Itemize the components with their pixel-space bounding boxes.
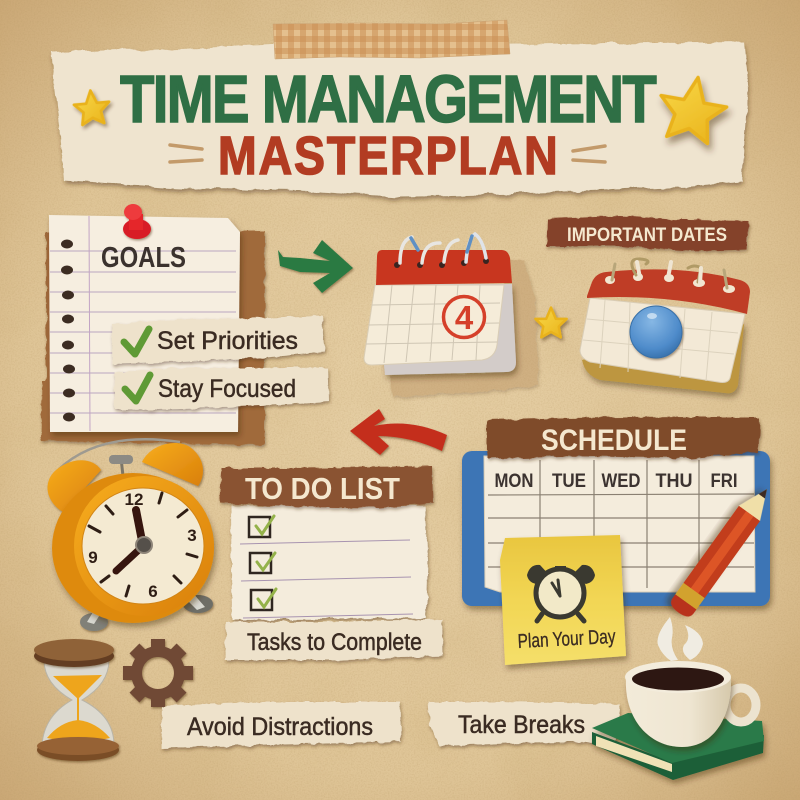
panel: calendar with date 4 bbox=[364, 234, 538, 397]
binder rings bbox=[605, 259, 735, 293]
icon: red push pin bbox=[123, 204, 151, 239]
strip: Stay Focused: Stay Focused bbox=[158, 375, 296, 403]
date grid bbox=[366, 285, 500, 363]
strip: Tasks to Complete: Tasks to Complete bbox=[247, 629, 422, 656]
spiral rings bbox=[394, 234, 489, 268]
page grid bbox=[583, 300, 738, 381]
strip: Set Priorities: Set Priorities bbox=[157, 327, 298, 355]
bezel bbox=[74, 476, 214, 616]
red header bbox=[587, 269, 750, 314]
checkbox rows bbox=[240, 516, 413, 618]
strip: Tasks to Complete bbox=[225, 619, 443, 660]
blue button bbox=[630, 306, 682, 358]
timetable sheet bbox=[484, 456, 755, 592]
sticky label: Plan Your Day bbox=[517, 626, 616, 653]
strip: Set Priorities bbox=[112, 316, 325, 364]
page rules bbox=[50, 216, 236, 431]
dial bbox=[82, 488, 204, 604]
icon: gear bbox=[123, 639, 193, 707]
icon: small star bbox=[73, 89, 111, 125]
lower sand bbox=[47, 720, 110, 742]
dial numbers: 3 bbox=[187, 526, 197, 545]
top cap bbox=[34, 639, 114, 667]
clock hands bbox=[116, 510, 143, 571]
dial numbers: 6 bbox=[148, 582, 158, 601]
heading banner: To Do List: TO DO LIST bbox=[245, 471, 400, 506]
icon: green check bbox=[125, 375, 150, 401]
dial numbers: 9 bbox=[88, 548, 98, 567]
heading banner: Schedule: SCHEDULE bbox=[541, 424, 687, 457]
heading banner: To Do List bbox=[219, 466, 433, 508]
strip: Avoid Distractions: Avoid Distractions bbox=[187, 713, 373, 741]
subtitle: Masterplan: MASTERPLAN bbox=[218, 125, 558, 186]
clock feet bbox=[80, 592, 213, 631]
back pages bbox=[376, 284, 516, 375]
title line: Time Management: TIME MANAGEMENT bbox=[120, 62, 657, 137]
panel: title banner bbox=[52, 20, 749, 197]
front page bbox=[364, 285, 504, 365]
icon: alarm clock sketch bbox=[527, 565, 595, 621]
body bbox=[52, 473, 214, 623]
icon: coffee cup bbox=[625, 617, 756, 747]
stain shadow bbox=[390, 258, 538, 397]
strip: Take Breaks bbox=[428, 702, 620, 746]
arrow: red, schedule to to-do bbox=[350, 409, 447, 455]
weekday labels: TUE bbox=[552, 471, 586, 492]
icon: large star bbox=[654, 72, 731, 146]
cardboard backing bbox=[41, 231, 265, 445]
left bell bbox=[48, 460, 101, 512]
dial numbers: 12 bbox=[125, 490, 143, 509]
strip: Stay Focused bbox=[114, 367, 329, 410]
subtitle dashes left bbox=[170, 145, 202, 162]
sand stream bbox=[77, 698, 79, 724]
icon: green book bbox=[592, 713, 764, 780]
cup body bbox=[626, 678, 731, 747]
subtitle dashes right bbox=[573, 146, 605, 162]
weekday labels: FRI bbox=[710, 471, 738, 492]
binder holes bbox=[61, 240, 75, 422]
glass bbox=[42, 660, 114, 745]
heading banner: Important Dates bbox=[547, 216, 748, 251]
weekday labels: WED bbox=[602, 471, 640, 492]
circled date bbox=[444, 296, 484, 338]
coffee bbox=[632, 668, 724, 690]
weekday labels: THU bbox=[656, 471, 692, 492]
panel: to do list bbox=[219, 466, 443, 660]
strip: Take Breaks: Take Breaks bbox=[458, 711, 585, 739]
arrow: green, goals to calendar bbox=[278, 240, 353, 293]
steam bbox=[658, 617, 703, 661]
top arc bbox=[58, 439, 180, 470]
lined sheet bbox=[231, 506, 428, 620]
weekday labels: MON bbox=[494, 471, 534, 492]
icon: hourglass bbox=[34, 639, 119, 761]
base bbox=[37, 737, 119, 761]
heading banner: Important Dates: IMPORTANT DATES bbox=[567, 225, 727, 246]
handle bbox=[109, 455, 133, 476]
strip: Avoid Distractions bbox=[161, 702, 401, 748]
upper sand bbox=[53, 675, 102, 699]
lined notebook page bbox=[49, 215, 240, 432]
panel: schedule bbox=[462, 417, 770, 606]
weekday labels bbox=[494, 471, 738, 492]
icon: yellow star bbox=[535, 308, 567, 337]
handle bbox=[726, 688, 756, 722]
gingham washi tape bbox=[273, 20, 510, 59]
rim bbox=[625, 661, 731, 693]
page bbox=[580, 298, 745, 382]
icon: alarm clock bbox=[48, 439, 214, 631]
dial numbers bbox=[88, 490, 197, 601]
right bell bbox=[142, 443, 203, 486]
panel: sticky note bbox=[500, 535, 626, 665]
circled date: 4 bbox=[455, 299, 474, 336]
blue board bbox=[462, 451, 770, 606]
grid lines bbox=[488, 460, 754, 592]
hub bbox=[136, 537, 152, 553]
heading: Goals: GOALS bbox=[101, 242, 186, 274]
heading banner: Schedule bbox=[487, 417, 760, 459]
panel: calendar with blue button bbox=[580, 259, 750, 393]
red header bbox=[376, 250, 512, 285]
icon: red pencil bbox=[668, 481, 778, 620]
torn paper sheet bbox=[52, 42, 749, 197]
golden back cover bbox=[582, 320, 744, 393]
icon: green check bbox=[124, 329, 149, 354]
panel: goals note bbox=[41, 204, 329, 445]
tick marks bbox=[89, 493, 197, 596]
